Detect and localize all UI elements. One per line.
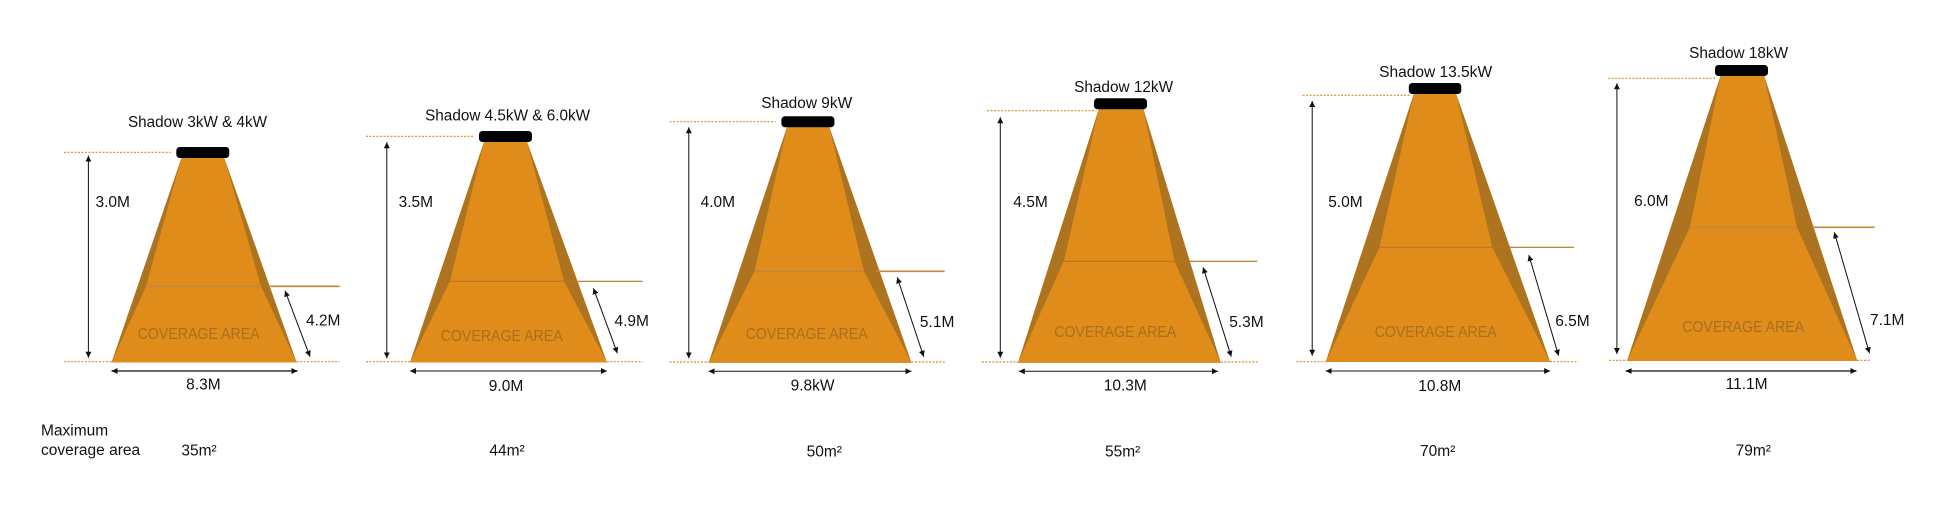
mid height line [1064, 260, 1257, 262]
height label: 6.0M [1634, 193, 1669, 210]
heat cone [709, 127, 912, 363]
area value: 70m² [1420, 443, 1455, 460]
slant label: 5.1M [920, 314, 954, 331]
panel: Shadow 18kW [1608, 45, 1904, 460]
heat cone [112, 158, 297, 362]
height guide line [64, 152, 340, 362]
height guide line [982, 111, 1257, 362]
area value: 79m² [1736, 442, 1771, 460]
height label: 3.5M [399, 194, 433, 211]
height label: 5.0M [1328, 194, 1363, 211]
slant arrow [897, 277, 924, 357]
area value: 44m² [489, 442, 525, 460]
coverage label: COVERAGE AREA [1682, 319, 1804, 336]
width arrow [1019, 370, 1218, 372]
height arrow [1311, 101, 1313, 356]
heater bar [1715, 65, 1768, 76]
height arrow [688, 127, 690, 358]
height guide line [1608, 78, 1871, 360]
mid height line [450, 280, 643, 282]
slant arrow [285, 291, 310, 357]
coverage label: COVERAGE AREA [1054, 324, 1176, 341]
heat cone [1627, 76, 1857, 361]
slant arrow [1203, 267, 1231, 357]
heater bar [176, 147, 229, 158]
heading: Shadow 13.5kW: Shadow 13.5kW [1379, 64, 1492, 81]
area value: 35m² [181, 442, 217, 460]
slant label: 5.3M [1229, 314, 1264, 331]
panel: Shadow 13.5kW [1296, 64, 1590, 460]
slant label: 7.1M [1870, 312, 1904, 329]
slant label: 4.9M [614, 313, 649, 330]
panel: Shadow 3kW & 4kW [41, 114, 340, 460]
heading: Shadow 4.5kW & 6.0kW: Shadow 4.5kW & 6.0kW [425, 108, 590, 124]
height label: 4.0M [701, 194, 735, 211]
height arrow [87, 156, 89, 358]
mid height line [1690, 226, 1875, 228]
height guide line [1296, 95, 1578, 362]
heater bar [1409, 83, 1461, 94]
heat cone [1326, 94, 1550, 362]
width label: 11.1M [1726, 376, 1768, 393]
heater bar [781, 116, 834, 127]
slant label: 6.5M [1555, 313, 1590, 330]
slant arrow [593, 288, 617, 353]
height label: 3.0M [96, 194, 130, 211]
row label: maximum coverage area [41, 422, 140, 459]
heading: Shadow 18kW: Shadow 18kW [1689, 45, 1788, 62]
row label: maximum coverage area: Maximum [41, 422, 108, 440]
panel: Shadow 9kW [670, 95, 954, 461]
coverage label: COVERAGE AREA [138, 326, 260, 343]
width arrow [709, 370, 912, 372]
slant arrow [1834, 232, 1870, 353]
row label: maximum coverage area: coverage area [41, 442, 140, 459]
heading: Shadow 3kW & 4kW: Shadow 3kW & 4kW [128, 114, 267, 131]
width label: 8.3M [186, 376, 221, 394]
heater bar [1094, 98, 1147, 109]
width arrow [410, 370, 607, 372]
width label: 10.8M [1418, 378, 1461, 395]
height arrow [386, 142, 388, 358]
width arrow [1626, 370, 1856, 372]
mid height line [1379, 246, 1574, 248]
area value: 50m² [807, 444, 842, 460]
width arrow [112, 370, 298, 372]
panel: Shadow 4.5kW & 6.0kW [366, 108, 649, 460]
coverage label: COVERAGE AREA [746, 326, 868, 343]
area value: 55m² [1105, 444, 1140, 460]
heat cone [1018, 109, 1221, 363]
heater bar [479, 131, 532, 142]
height arrow [999, 117, 1001, 358]
width label: 9.0M [489, 378, 523, 395]
heading: Shadow 12kW: Shadow 12kW [1074, 79, 1173, 96]
heat cone [410, 142, 607, 362]
height label: 4.5M [1013, 194, 1048, 211]
slant arrow [1529, 255, 1559, 356]
panel: Shadow 12kW [982, 79, 1264, 461]
mid height line [754, 270, 945, 272]
width arrow [1326, 370, 1550, 372]
width label: 10.3M [1104, 378, 1147, 394]
height guide line [366, 136, 643, 362]
height guide line [670, 122, 945, 362]
coverage label: COVERAGE AREA [441, 328, 563, 345]
slant label: 4.2M [306, 312, 340, 330]
height arrow [1616, 83, 1618, 354]
heading: Shadow 9kW: Shadow 9kW [761, 95, 853, 112]
mid height line [146, 285, 340, 287]
width label: 9.8kW [791, 378, 835, 394]
coverage label: COVERAGE AREA [1375, 324, 1497, 341]
